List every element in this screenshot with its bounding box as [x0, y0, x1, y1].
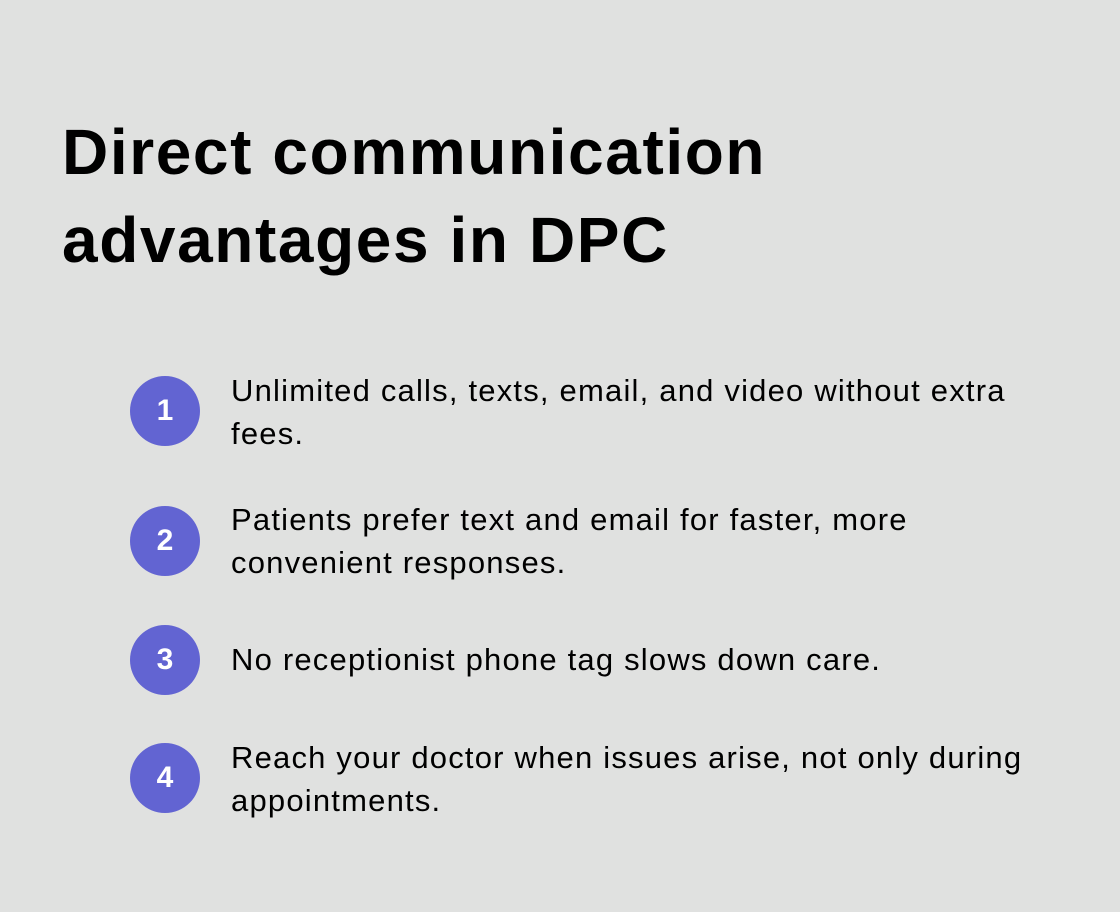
- text 2: [231, 502, 908, 580]
- text 4: appointments.: [231, 783, 441, 818]
- badge 1: [130, 376, 200, 446]
- title: advantages in DPC: [62, 204, 669, 276]
- text 4: [231, 740, 1022, 818]
- text 1: fees.: [231, 416, 304, 451]
- badge 2: [130, 506, 200, 576]
- text 3: No receptionist phone tag slows down care.: [231, 642, 881, 677]
- badge 3: [130, 625, 200, 695]
- title: [62, 116, 766, 276]
- text 1: Unlimited calls, texts, email, and video without extra: [231, 373, 1006, 408]
- badge 1: 1: [157, 394, 173, 427]
- item 2: [130, 502, 908, 580]
- text 4: Reach your doctor when issues arise, not only during: [231, 740, 1022, 775]
- badge 2: 2: [157, 524, 173, 557]
- text 1: [231, 373, 1006, 451]
- item 4: [130, 740, 1022, 818]
- badge 3: 3: [157, 643, 173, 676]
- badge 4: 4: [157, 761, 173, 794]
- item 3: [130, 625, 881, 695]
- text 2: Patients prefer text and email for faster, more: [231, 502, 908, 537]
- item 1: [130, 373, 1006, 451]
- text 2: convenient responses.: [231, 545, 566, 580]
- title: Direct communication: [62, 116, 766, 188]
- badge 4: [130, 743, 200, 813]
